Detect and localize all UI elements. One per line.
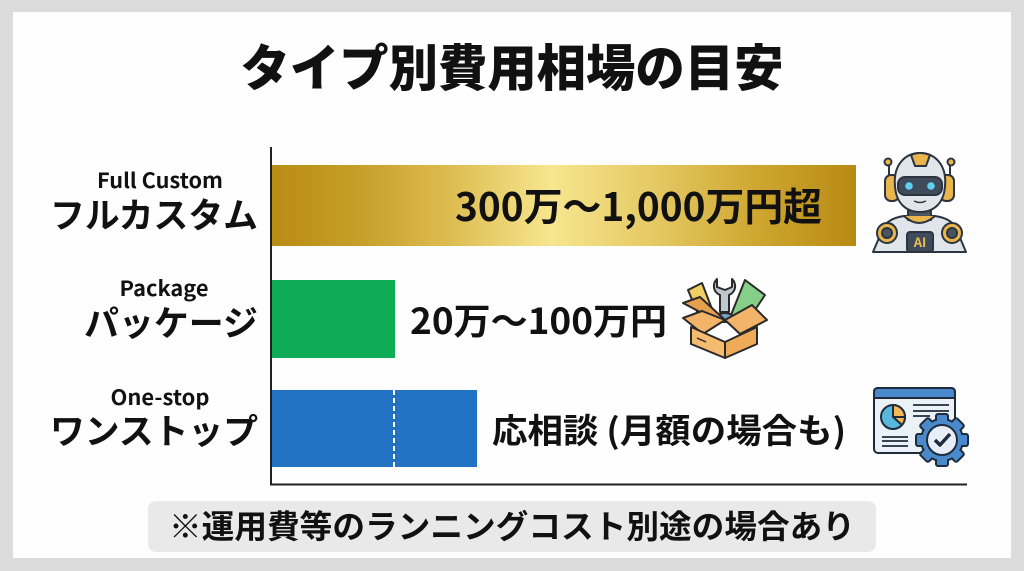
title: タイプ別費用相場の目安 (240, 29, 784, 101)
label: package: Package (120, 273, 208, 303)
icon: robot: AI (913, 232, 926, 251)
icon: robot (873, 153, 966, 252)
label: one-stop: ワンストップ (50, 404, 258, 455)
bar: package (271, 280, 395, 358)
label: package: パッケージ (84, 296, 258, 347)
label: full custom: Full Custom (97, 165, 223, 195)
chart: cost ranges by type (271, 147, 967, 484)
value: package: 20万〜100万円 (410, 293, 667, 345)
footnote callout: ※運用費等のランニングコスト別途の場合あり (169, 501, 855, 548)
bar: one-stop (271, 390, 477, 467)
bar: full custom (271, 165, 856, 246)
label: one-stop: One-stop (110, 382, 210, 412)
label: one-stop (50, 382, 258, 455)
value: full custom: 300万〜1,000万円超 (455, 177, 822, 233)
label: full custom (50, 165, 258, 239)
icon: dashboard and gear (874, 388, 968, 466)
icon: toolbox (683, 279, 767, 358)
chart axes (271, 147, 967, 484)
label: full custom: フルカスタム (50, 188, 258, 239)
label: package (84, 273, 258, 347)
value: one-stop: 応相談 (月額の場合も) (492, 404, 846, 453)
